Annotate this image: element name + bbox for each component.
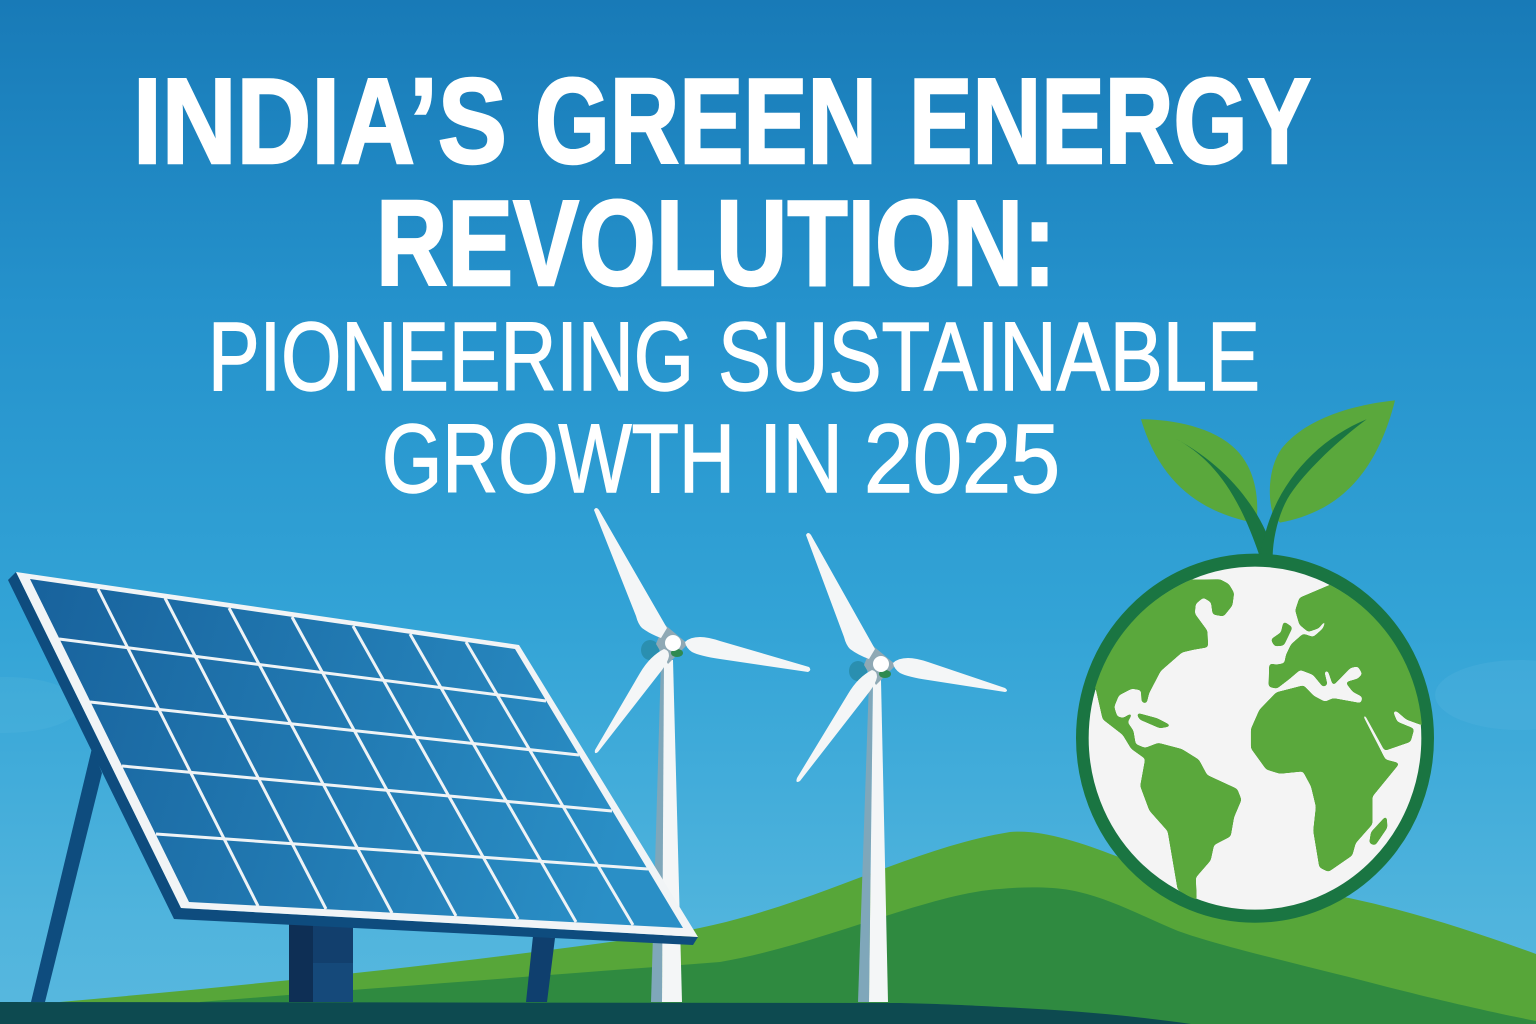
globe ocean and ring [1082, 560, 1428, 916]
title line 1: INDIA’S [133, 53, 507, 189]
subtitle line 1: PIONEERING [208, 302, 694, 411]
title [133, 53, 1311, 513]
icon: globe with sprout [1082, 400, 1443, 916]
wind turbine 1 [594, 508, 810, 1002]
solar panel supports [31, 748, 555, 1002]
wind turbine 2 [796, 533, 1007, 1002]
dark ground strip [0, 1002, 1191, 1024]
title line 2: REVOLUTION: [376, 175, 1056, 311]
subtitle line 1: SUSTAINABLE [718, 302, 1260, 411]
title line 1: GREEN [535, 53, 877, 189]
title line 1 [133, 53, 1311, 189]
subtitle line 1 [208, 302, 1260, 411]
solar panel [8, 572, 698, 945]
continents [1095, 579, 1422, 899]
subtitle line 2: IN [759, 404, 843, 513]
green hills [60, 832, 1536, 1024]
title line 1: ENERGY [909, 53, 1311, 189]
leaves [1141, 400, 1395, 523]
subtitle line 2 [382, 404, 1060, 513]
subtitle line 2: GROWTH [382, 404, 735, 513]
subtitle line 2: 2025 [864, 404, 1060, 513]
stem [1175, 419, 1367, 555]
